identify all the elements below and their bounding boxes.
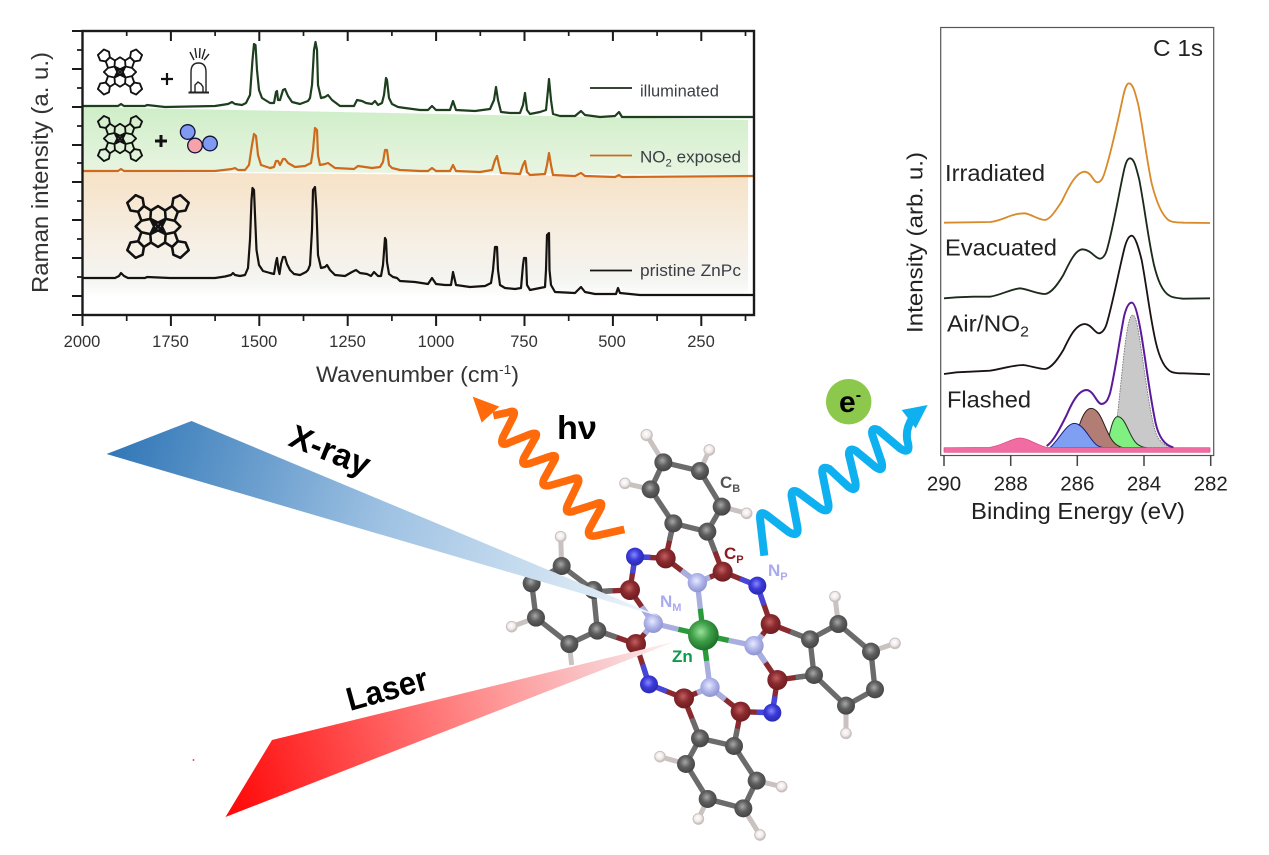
component: green peak [1107, 417, 1147, 448]
arrow: orange photon wave [473, 397, 624, 536]
x-axis tick labels: 750 [510, 333, 538, 351]
icon: lamp [188, 48, 209, 92]
icon: ZnPc molecule, illuminated [98, 49, 142, 95]
icon: plus sign [161, 73, 173, 85]
panel: Raman spectra chart [27, 31, 754, 387]
bonds: inner nitrogen half segments [642, 571, 766, 699]
label: CB: C [720, 473, 732, 492]
atoms: pyrrole carbon [620, 548, 787, 722]
label: CP: P [736, 554, 744, 566]
label: NM: N [660, 592, 672, 611]
spectrum: flashed envelope [1047, 303, 1173, 447]
bonds: carbon rings [532, 462, 875, 808]
x-axis tick labels: 250 [687, 333, 715, 351]
spectrum: air NO2 [944, 236, 1210, 374]
label: Air/NO2: Air/NO [947, 310, 1016, 336]
spectrum: pristine ZnPc [83, 187, 754, 295]
component: brown peak [1073, 408, 1123, 448]
bonds: zinc half segments [678, 609, 729, 661]
x-axis tick labels: 1750 [152, 333, 189, 351]
panel: XPS C 1s chart [902, 28, 1228, 524]
x-axis tick labels: 2000 [64, 333, 100, 351]
badge: electron [826, 379, 871, 424]
label: Zn: Zn [672, 647, 693, 666]
beam: laser [226, 642, 675, 817]
icon: ZnPc molecule, NO2 exposed [98, 116, 142, 161]
x-axis ticks [944, 455, 1211, 466]
x-axis tick labels: 288 [994, 472, 1028, 496]
label: NP: P [780, 571, 788, 583]
x-axis title: Binding Energy (eV) [971, 498, 1185, 524]
x-axis tick labels: 1500 [241, 333, 277, 351]
spectrum: irradiated [944, 83, 1210, 223]
x-axis title: -1 [499, 362, 511, 377]
legend: illuminated [590, 82, 719, 100]
atoms: bridging nitrogen [626, 548, 781, 722]
bonds: zinc to inner nitrogen [653, 583, 754, 687]
x-axis tick labels: 500 [598, 333, 626, 351]
red speck [193, 759, 194, 761]
component: gray main peak [1113, 315, 1173, 448]
label: Air/NO2: 2 [1020, 324, 1029, 340]
x-axis tick labels [64, 333, 715, 351]
arrow: blue electron wave [760, 405, 928, 556]
atoms: inner nitrogen [644, 573, 764, 697]
bonds: pyrrole to benzene, aza bridges and inner nitrogen [595, 523, 814, 746]
label: X-ray: X-ray [284, 417, 377, 483]
x-axis tick labels [927, 472, 1228, 496]
legend: NO2 exposed [590, 148, 741, 170]
label: Irradiated: Irradiated [945, 160, 1045, 186]
spectrum: evacuated [944, 158, 1210, 299]
component: blue peak [1050, 423, 1105, 448]
frame [941, 28, 1214, 456]
badge: electron: e [839, 386, 856, 419]
x-axis tick labels: 286 [1060, 472, 1094, 496]
label: hv: hν [557, 409, 597, 446]
component: pink peak and baseline [944, 438, 1210, 452]
label: NP: N [768, 561, 780, 580]
tan background band [84, 172, 748, 298]
fitted components and spectra [944, 83, 1210, 452]
atom: zinc [688, 620, 719, 650]
bonds: blue half segments [633, 557, 775, 713]
label: CB: B [732, 483, 740, 495]
y-axis title: Raman intensity (a. u.) [27, 52, 53, 293]
x-axis tick labels: 284 [1127, 472, 1161, 496]
label: C 1s: C 1s [1153, 35, 1203, 61]
label: Flashed: Flashed [947, 386, 1031, 412]
x-axis tick labels: 282 [1194, 472, 1228, 496]
icon: NO2 molecule [180, 125, 217, 153]
axes frame and ticks [72, 31, 754, 326]
label: Evacuated: Evacuated [945, 234, 1057, 260]
atoms: benzene carbon [523, 453, 884, 817]
icon: plus sign bold [155, 135, 167, 147]
spectrum: NO2 exposed [83, 128, 754, 177]
legend: illuminated: illuminated [640, 82, 719, 100]
legend: NO2 exposed: NO [640, 148, 665, 166]
legend: NO2 exposed: 2 [666, 158, 672, 170]
legend: NO2 exposed: exposed [672, 148, 741, 166]
green background band [84, 107, 748, 175]
label: NM: M [672, 602, 681, 614]
x-axis title: Wavenumber (cm [316, 362, 489, 387]
x-axis tick labels: 290 [927, 472, 961, 496]
bonds: hydrogens [512, 435, 895, 835]
atoms: hydrogen [506, 429, 900, 840]
badge: electron: - [856, 387, 861, 404]
spectrum: illuminated [83, 42, 754, 117]
bonds: gray half segments [595, 523, 814, 746]
beam: X-ray [106, 421, 660, 616]
y-axis title: Intensity (arb. u.) [902, 152, 928, 333]
x-axis title: ) [511, 362, 519, 387]
molecule: ZnPc ball and stick [506, 429, 900, 840]
legend: pristine ZnPc: pristine ZnPc [640, 262, 741, 280]
x-axis tick labels: 1000 [418, 333, 454, 351]
label: CP: C [724, 544, 736, 563]
icon: ZnPc molecule, pristine [127, 195, 189, 258]
label: Laser: Laser [342, 660, 432, 718]
x-axis tick labels: 1250 [329, 333, 366, 351]
